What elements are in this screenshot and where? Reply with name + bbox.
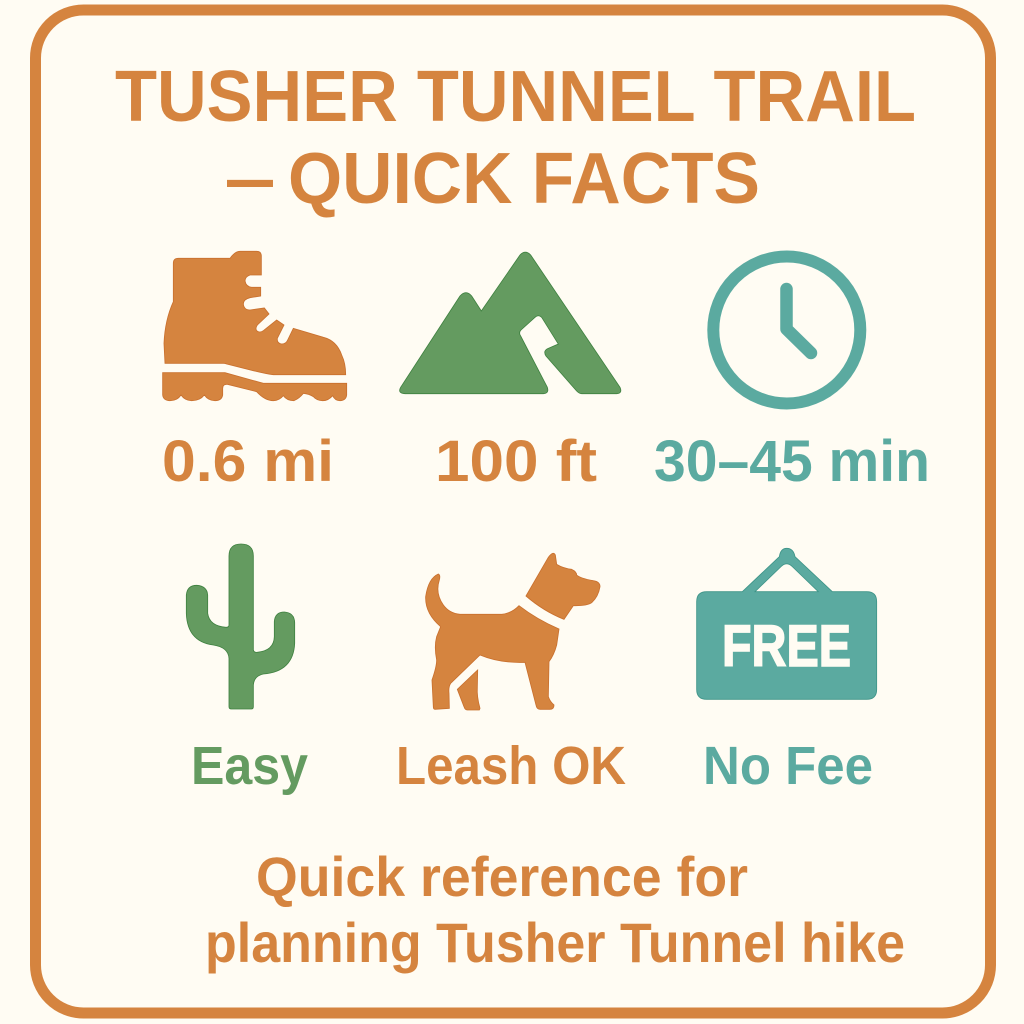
label: duration: 30–45 min — [654, 429, 930, 494]
icon: cactus — [186, 544, 295, 709]
icon: free sign: FREE — [722, 614, 851, 679]
label: difficulty: Easy — [191, 736, 308, 796]
label: distance: 0.6 mi — [162, 429, 334, 494]
title: QUICK FACTS — [288, 139, 760, 219]
stat: distance — [162, 251, 347, 494]
icon: dog with collar — [426, 553, 600, 710]
label: dogs: Leash OK — [396, 736, 626, 796]
title: — — [227, 139, 273, 219]
stat: dogs — [396, 553, 626, 796]
icon: mountain with tunnel — [400, 252, 621, 394]
caption: Quick reference for — [256, 845, 748, 908]
stat: difficulty — [186, 544, 308, 796]
stat: fee — [697, 548, 877, 796]
icon: hiking boot — [163, 251, 347, 401]
title: TUSHER TUNNEL TRAIL — [115, 57, 916, 137]
title — [115, 57, 916, 219]
icon: clock — [713, 256, 860, 404]
stat: elevation — [400, 252, 621, 494]
label: elevation: 100 ft — [435, 429, 597, 494]
caption — [205, 845, 905, 974]
caption: planning Tusher Tunnel hike — [205, 911, 905, 974]
stat: duration — [654, 256, 930, 494]
label: fee: No Fee — [703, 736, 873, 796]
icon: free sign — [697, 548, 877, 699]
